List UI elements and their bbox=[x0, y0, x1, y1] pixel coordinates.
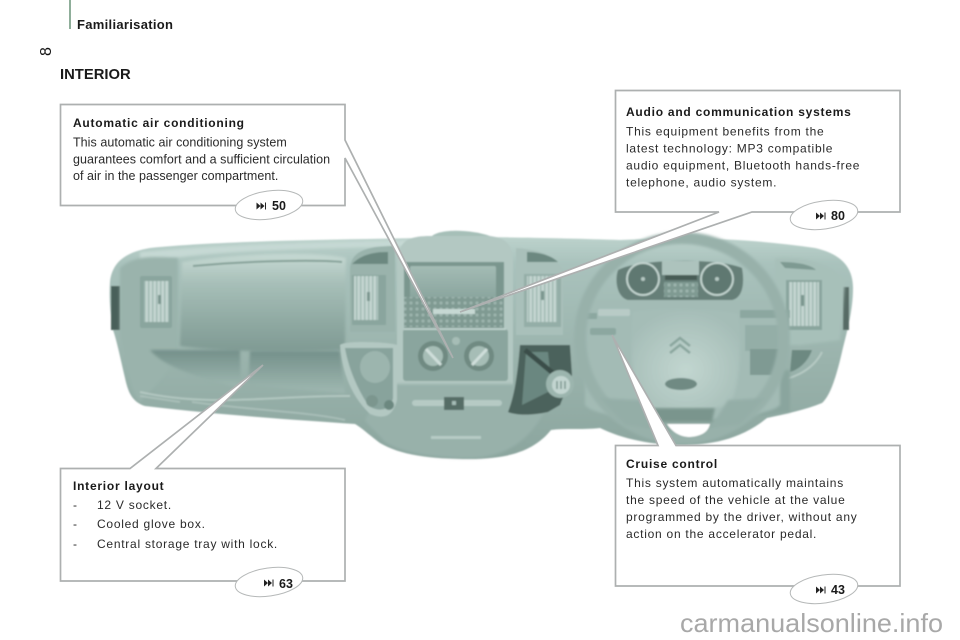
panel: interior layout bbox=[60, 365, 345, 601]
wheel lower band bbox=[650, 408, 715, 422]
body text: latest technology: MP3 compatible bbox=[626, 142, 833, 156]
body text: This automatic air conditioning system bbox=[73, 136, 287, 150]
lower storage tray left bbox=[150, 350, 241, 388]
climate knob right bbox=[464, 341, 494, 371]
page reference 43 bbox=[788, 570, 860, 608]
dark side slit left bbox=[111, 286, 120, 330]
heading: INTERIOR: INTERIOR bbox=[60, 67, 131, 83]
heading: Interior layout bbox=[73, 479, 164, 493]
heading: Cruise control bbox=[626, 457, 718, 471]
maker emblem bbox=[670, 338, 690, 353]
climate panel bbox=[403, 329, 508, 381]
dashboard body bbox=[110, 237, 853, 459]
callout box and pointer bbox=[612, 335, 900, 586]
glove box bbox=[180, 254, 346, 351]
centre stack bbox=[397, 231, 513, 400]
steering wheel hub: airbag bbox=[632, 309, 740, 410]
page reference 80 bbox=[788, 196, 860, 234]
body text bbox=[626, 476, 857, 541]
body text: action on the accelerator pedal. bbox=[626, 527, 817, 541]
centre-left vent bbox=[350, 246, 395, 332]
bullet list: 12 V socket. bbox=[97, 498, 172, 512]
page reference 63: 63 bbox=[279, 577, 293, 591]
body text bbox=[73, 136, 330, 183]
display recess bbox=[404, 262, 504, 330]
panel: cruise control bbox=[612, 335, 900, 608]
header rule bbox=[69, 0, 71, 29]
stalk controls right bbox=[740, 310, 790, 375]
column lower panel bbox=[585, 300, 780, 420]
lower trim strip bbox=[140, 392, 350, 400]
gauge left bbox=[626, 262, 660, 296]
bullet list: - bbox=[73, 498, 78, 512]
gauge right bbox=[700, 262, 734, 296]
centre display bbox=[662, 261, 699, 275]
body text: This equipment benefits from the bbox=[626, 124, 824, 138]
dark side slit right bbox=[843, 287, 849, 330]
body text: of air in the passenger compartment. bbox=[73, 169, 278, 183]
climate knob left bbox=[418, 341, 448, 371]
panel: automatic air conditioning bbox=[60, 104, 453, 358]
watermark: carmanualsonline.info bbox=[680, 608, 943, 638]
radio controls bbox=[404, 297, 504, 327]
gap in lower wheel bbox=[667, 424, 710, 437]
panel: audio and communication systems bbox=[460, 90, 900, 312]
section title: Familiarisation: Familiarisation bbox=[77, 17, 173, 32]
page reference 63 bbox=[233, 563, 305, 601]
right vent bbox=[786, 280, 822, 330]
right dash section bbox=[770, 258, 845, 382]
body text: programmed by the driver, without any bbox=[626, 510, 857, 524]
gear lever tunnel bbox=[508, 345, 574, 415]
page reference 80: 80 bbox=[831, 209, 845, 223]
bullet list: - bbox=[73, 537, 78, 551]
badge oval bbox=[665, 378, 697, 390]
bullet list: Cooled glove box. bbox=[97, 517, 206, 531]
heading: Audio and communication systems bbox=[626, 105, 852, 119]
body text bbox=[626, 124, 860, 190]
left vent bbox=[140, 276, 172, 328]
cup holder panel bbox=[340, 342, 397, 417]
page reference 50: 50 bbox=[272, 199, 286, 213]
heading: Automatic air conditioning bbox=[73, 116, 245, 130]
centre-right vent bbox=[516, 248, 563, 335]
lower right shadow bbox=[740, 370, 790, 416]
page reference 43: 43 bbox=[831, 583, 845, 597]
bullet list: Central storage tray with lock. bbox=[97, 537, 278, 551]
body text: This system automatically maintains bbox=[626, 476, 844, 490]
callout box and pointer bbox=[460, 90, 900, 312]
lower storage tray right bbox=[248, 351, 345, 393]
body text: the speed of the vehicle at the value bbox=[626, 493, 846, 507]
lower console bbox=[365, 384, 545, 458]
body text: audio equipment, Bluetooth hands-free bbox=[626, 158, 860, 172]
left end panel shade bbox=[120, 257, 178, 402]
slim trim above glove box bbox=[193, 261, 342, 266]
body text: guarantees comfort and a sufficient circulation bbox=[73, 152, 330, 166]
callout box and pointer bbox=[60, 365, 345, 581]
dashboard illustration bbox=[110, 231, 853, 459]
bullet list: - bbox=[73, 517, 78, 531]
steering wheel lower spokes bbox=[600, 398, 765, 430]
bullet list bbox=[73, 498, 278, 551]
top pad highlight bbox=[140, 240, 420, 262]
instrument binnacle bbox=[616, 261, 743, 300]
steering wheel rim bbox=[580, 238, 784, 438]
callout box and pointer bbox=[60, 104, 453, 358]
button row bbox=[412, 397, 502, 410]
body text: telephone, audio system. bbox=[626, 176, 777, 190]
stalk controls left bbox=[583, 309, 630, 335]
page reference 50 bbox=[233, 186, 305, 224]
page number: 8 bbox=[38, 47, 55, 56]
